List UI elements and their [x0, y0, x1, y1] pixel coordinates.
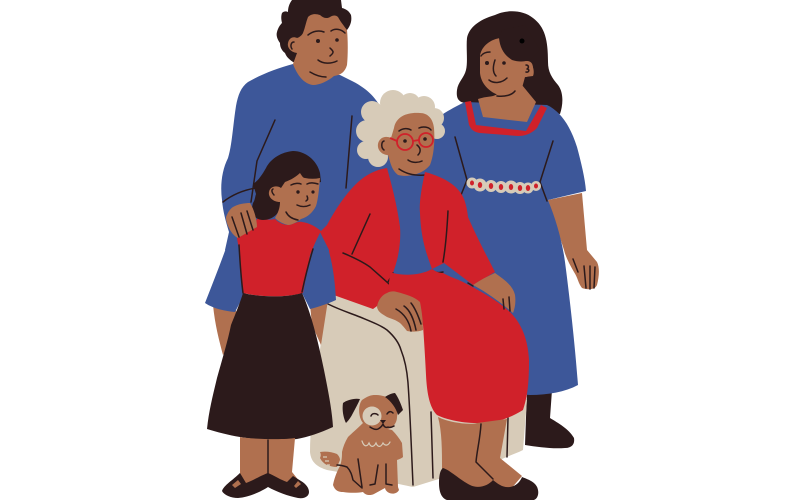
woman finger lines [573, 259, 595, 289]
dog collar squiggle [362, 441, 390, 446]
grandmother right hand [473, 273, 515, 313]
grandmother face [378, 113, 434, 176]
woman neck and chest [478, 85, 536, 122]
woman hair over forehead [499, 25, 540, 62]
woman arm [548, 193, 599, 289]
man hair [277, 0, 351, 63]
grandmother shoes [439, 468, 538, 500]
figure: woman standing at right [400, 11, 599, 448]
girl hair [252, 151, 321, 220]
woman hair flower [520, 38, 524, 44]
woman dress [400, 102, 586, 395]
dog tail [320, 452, 340, 467]
woman face lines [481, 52, 529, 96]
grandmother leg lines [476, 424, 493, 479]
girl sleeves [205, 245, 336, 312]
grandmother cardigan lines [343, 211, 473, 291]
dog tail marks [323, 457, 330, 465]
girl top seams [239, 245, 313, 293]
girl face [269, 173, 320, 225]
grandmother left hand [377, 291, 423, 332]
girl skirt [207, 293, 333, 440]
man sweater [221, 64, 400, 310]
girl face lines [272, 183, 318, 220]
dog body [333, 423, 403, 495]
dog face lines [370, 412, 394, 429]
grandmother skirt [388, 269, 529, 423]
figure: grandmother seated [320, 90, 538, 500]
chair [310, 290, 527, 487]
woman ear [522, 61, 533, 77]
grandmother cardigan [320, 168, 495, 309]
grandmother sweater [384, 170, 445, 280]
man face and neck [288, 14, 348, 85]
dog ears [343, 393, 403, 423]
man sleeve and body seams [223, 116, 352, 202]
dog head [359, 395, 397, 431]
chair seams [328, 304, 508, 485]
girl leg line [267, 440, 269, 474]
grandmother legs [438, 417, 522, 492]
girl shoes [222, 473, 309, 498]
grandmother face lines [382, 127, 431, 175]
woman belt beads [466, 178, 541, 194]
grandmother red glasses [390, 133, 433, 150]
dog back leg and leg lines [337, 459, 392, 488]
dog eye patch [362, 406, 382, 426]
girl top [237, 218, 321, 296]
dog [320, 393, 403, 495]
girl arms [213, 300, 328, 355]
woman hair [457, 11, 562, 114]
woman dress seams [455, 137, 553, 201]
woman face [480, 38, 534, 97]
grandmother hair [356, 90, 445, 167]
figure: girl standing in front [205, 151, 336, 498]
man hand over girl shoulder [226, 203, 257, 238]
man face lines [291, 29, 345, 77]
woman neckline red trim [465, 101, 547, 136]
girl legs [235, 437, 300, 486]
woman boot [525, 390, 574, 448]
figure: man standing at left [221, 0, 400, 310]
